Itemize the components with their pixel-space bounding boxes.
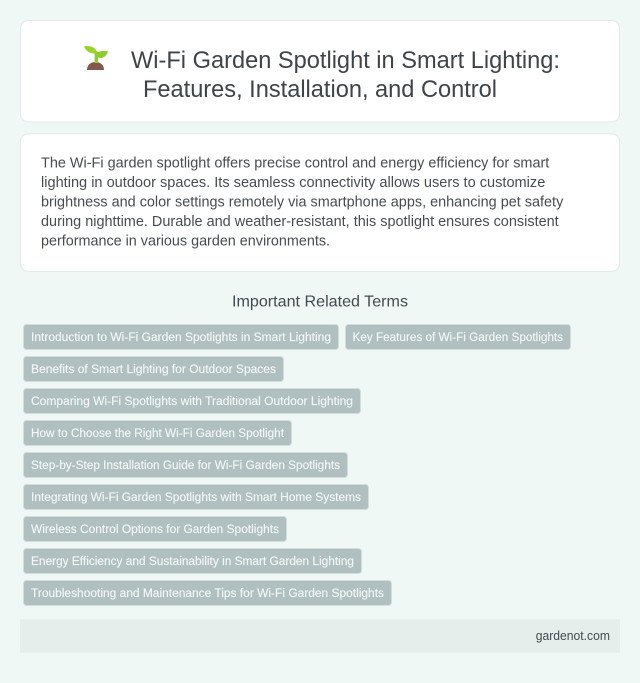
tag: introduction <box>24 324 338 350</box>
footer <box>20 619 620 653</box>
tag: key features <box>346 324 570 350</box>
text block: description: The Wi-Fi garden spotlight offers precise control and energy efficiency for smart <box>41 155 549 171</box>
icon: seedling <box>84 46 108 70</box>
tag: wireless control: Wireless Control Options for Garden Spotlights <box>31 522 279 536</box>
footer source text: gardenot.com <box>536 629 610 643</box>
text block: description: performance in various garden environments. <box>41 233 330 249</box>
title <box>131 47 560 103</box>
text block: description <box>41 155 564 249</box>
tag: energy efficiency <box>24 548 362 574</box>
title: Features, Installation, and Control <box>143 76 497 103</box>
tag: comparing: Comparing Wi-Fi Spotlights with Traditional Outdoor Lighting <box>31 394 353 408</box>
tag: installation guide <box>24 452 348 478</box>
text block: description: lighting in outdoor spaces. Its seamless connectivity allows users to customize <box>41 175 545 191</box>
tag: energy efficiency: Energy Efficiency and Sustainability in Smart Garden Lighting <box>31 554 354 568</box>
heading: related terms: Important Related Terms <box>232 294 408 311</box>
tag: comparing <box>24 388 360 414</box>
tag: troubleshooting <box>24 580 392 606</box>
tag: integrating: Integrating Wi-Fi Garden Spotlights with Smart Home Systems <box>31 490 361 504</box>
tag: troubleshooting: Troubleshooting and Maintenance Tips for Wi-Fi Garden Spotlights <box>31 586 384 600</box>
tag: benefits: Benefits of Smart Lighting for Outdoor Spaces <box>31 362 276 376</box>
text block: description: brightness and color settings remotely via smartphone apps, enhancing pet safety <box>41 194 564 210</box>
text block: description: during nighttime. Durable and weather-resistant, this spotlight ensures consistent <box>41 214 559 230</box>
tag list: related terms <box>24 324 570 606</box>
panel: description card <box>20 134 620 272</box>
tag: benefits <box>24 356 284 382</box>
tag: key features: Key Features of Wi-Fi Garden Spotlights <box>352 330 563 344</box>
title: Wi-Fi Garden Spotlight in Smart Lighting: <box>131 47 560 74</box>
tag: integrating <box>24 484 368 510</box>
tag: introduction: Introduction to Wi-Fi Garden Spotlights in Smart Lighting <box>31 330 331 344</box>
panel: title card <box>20 20 620 122</box>
tag: wireless control <box>24 516 286 542</box>
tag: installation guide: Step-by-Step Installation Guide for Wi-Fi Garden Spotlights <box>31 458 340 472</box>
tag: how to choose: How to Choose the Right Wi-Fi Garden Spotlight <box>31 426 285 440</box>
tag: how to choose <box>24 420 292 446</box>
